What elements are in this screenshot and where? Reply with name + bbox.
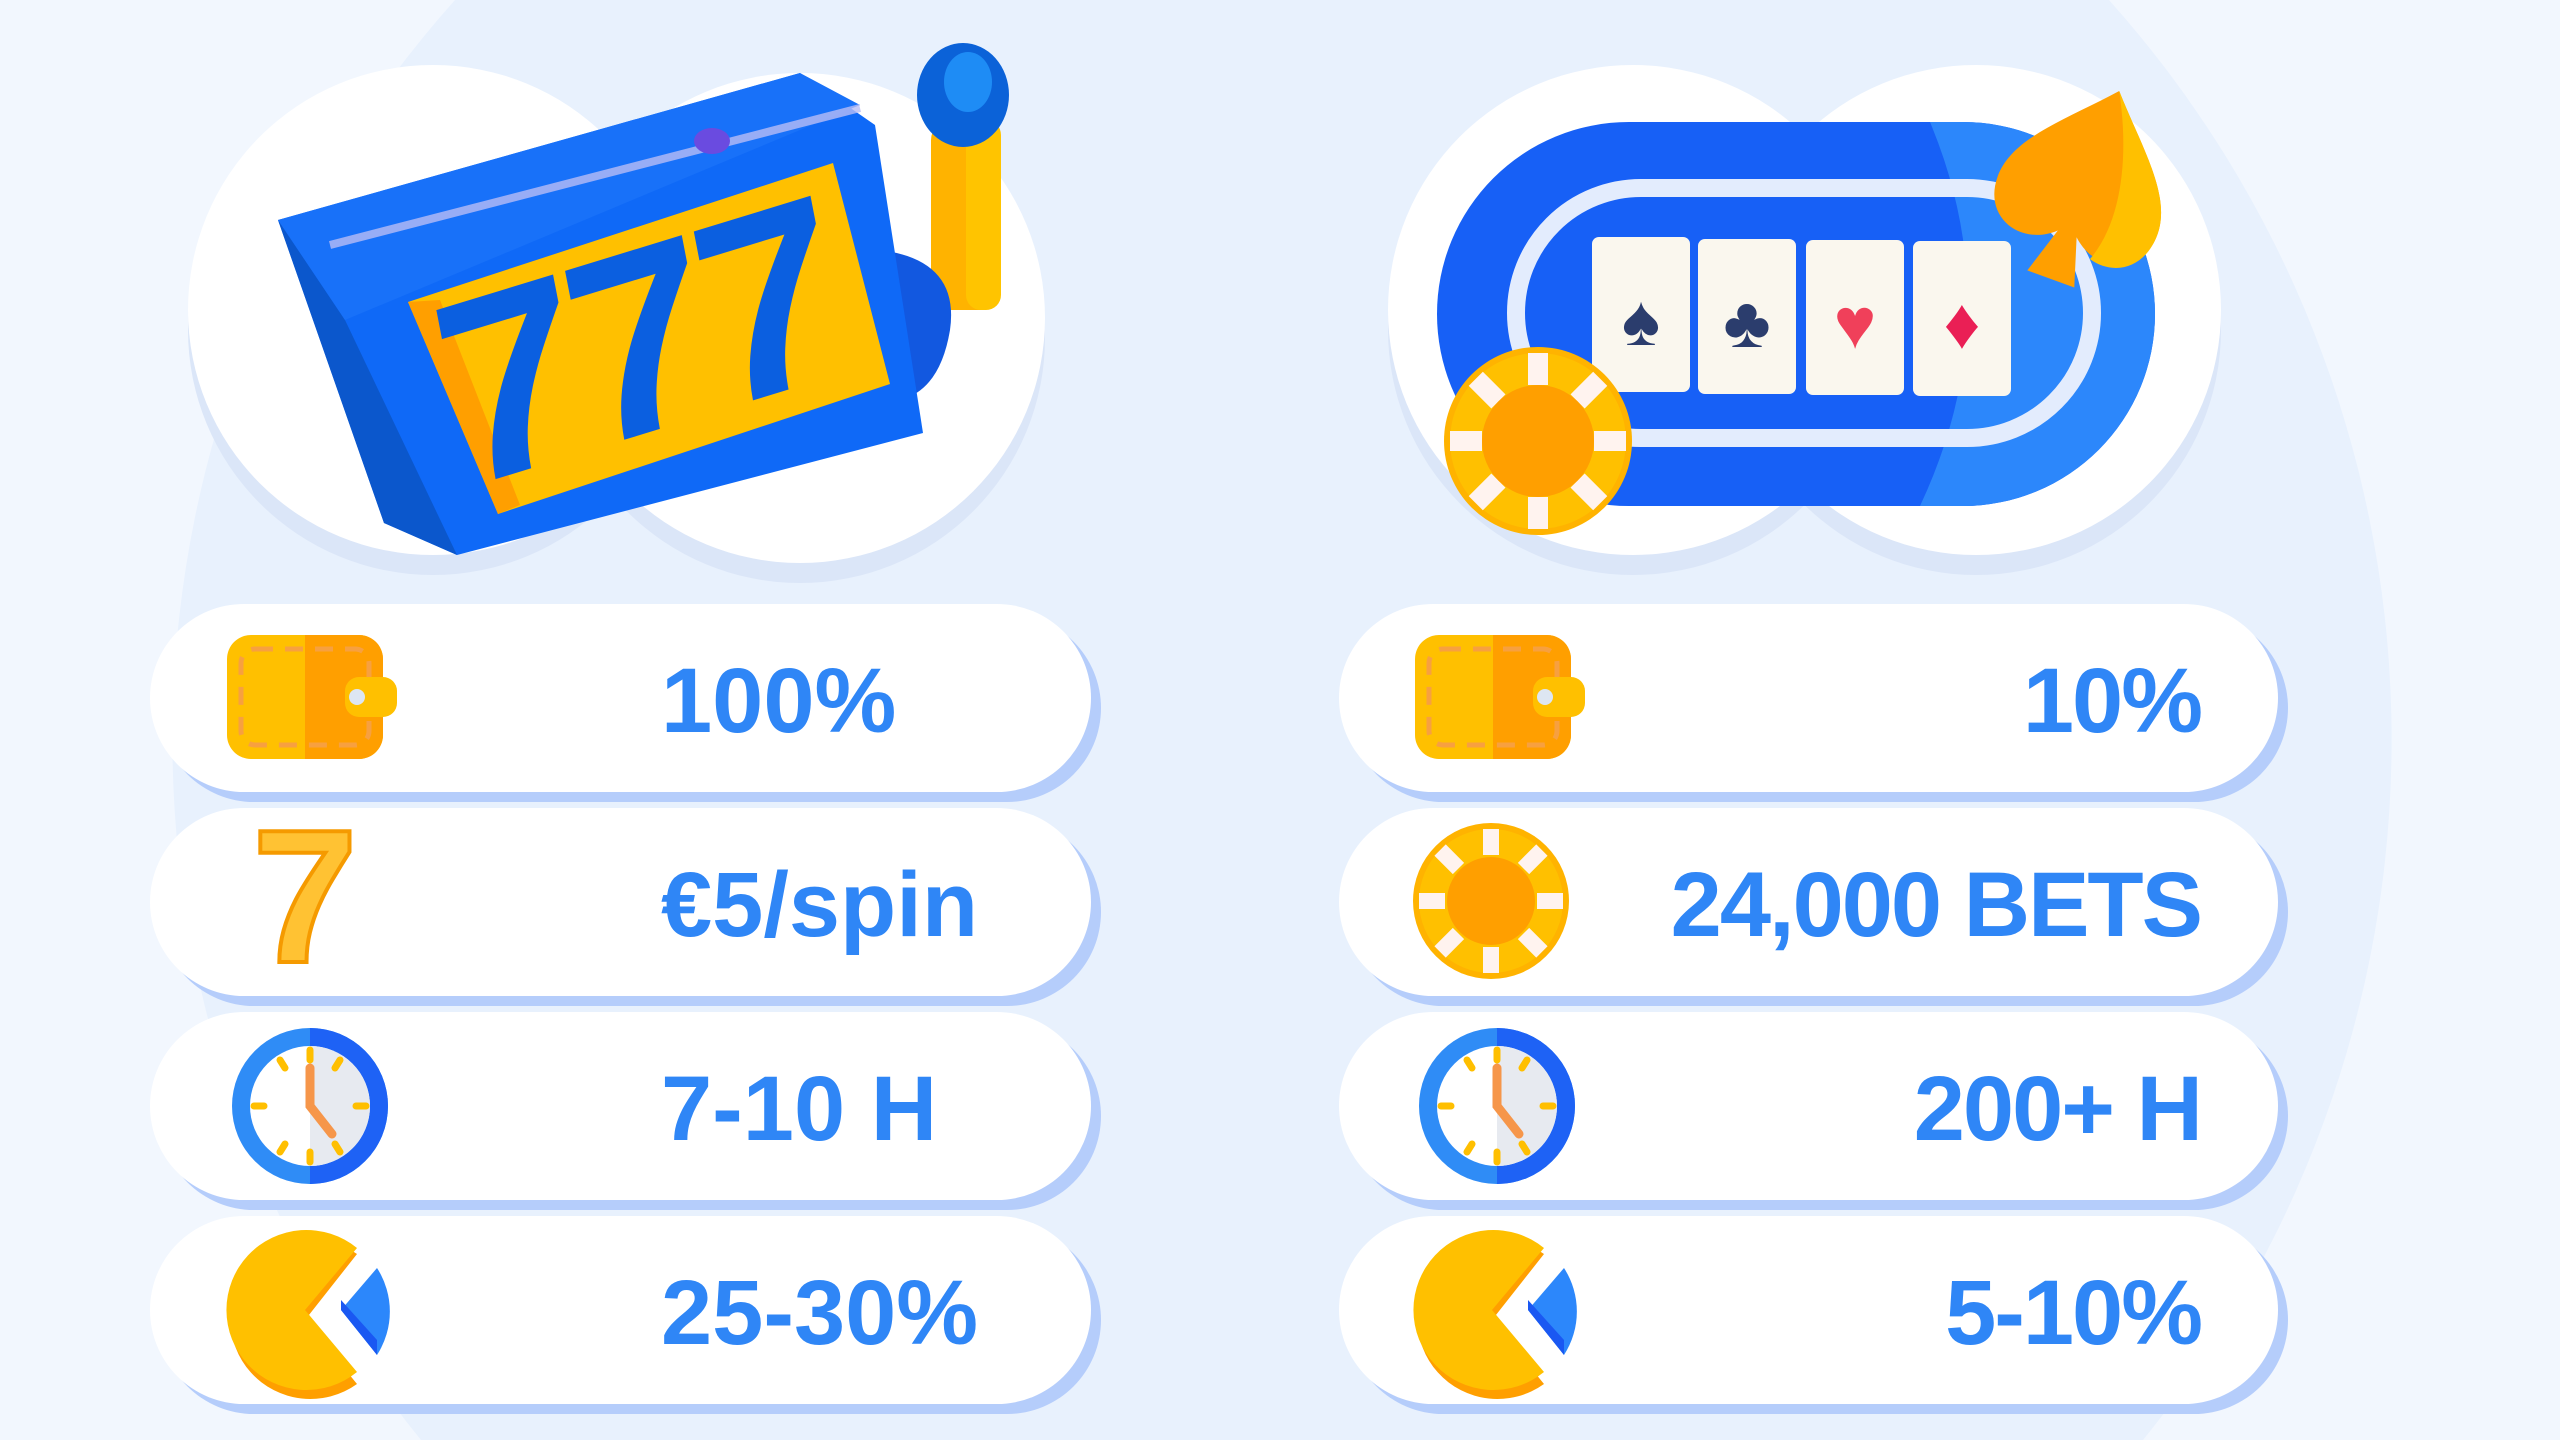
icon: slot machine: 777 [415, 141, 857, 545]
text: €5/spin: €5/spin [661, 854, 978, 956]
cards: ♣ [1723, 283, 1771, 363]
text: 25-30%: 25-30% [661, 1262, 978, 1364]
text: deposit 100%: 100% [661, 650, 896, 752]
cards: ♦ [1944, 284, 1980, 364]
text: 7-10 H: 7-10 H [661, 1058, 937, 1160]
icon: slot machine [278, 43, 1009, 555]
icon: wallet left [227, 635, 397, 759]
icon: big spade [1971, 62, 2199, 308]
icon: wallet right [1415, 635, 1585, 759]
icon: chip right [1413, 823, 1569, 979]
icon: pie right [1413, 1230, 1577, 1399]
cards: ♥ [1834, 284, 1876, 364]
text: 24,000 BETS: 24,000 BETS [1671, 854, 2201, 956]
icon: pie left [226, 1230, 390, 1399]
panel: left stats rows [150, 604, 1101, 1414]
icon: chip [1444, 347, 1632, 535]
icon: clock left [232, 1028, 388, 1184]
icon: clock right [1419, 1028, 1575, 1184]
panel: right stats rows [1339, 604, 2288, 1414]
panel: slot machine illustration [188, 43, 1045, 583]
text: 10%: 10% [2023, 650, 2201, 752]
text: 5-10%: 5-10% [1945, 1262, 2201, 1364]
text: 200+ H: 200+ H [1914, 1058, 2201, 1160]
cards [1592, 237, 2011, 396]
cards: ♠ [1622, 281, 1660, 361]
panel: poker table illustration [1388, 62, 2221, 575]
icon: poker table [1437, 62, 2199, 535]
icon: lucky seven: 7 [252, 791, 358, 1003]
